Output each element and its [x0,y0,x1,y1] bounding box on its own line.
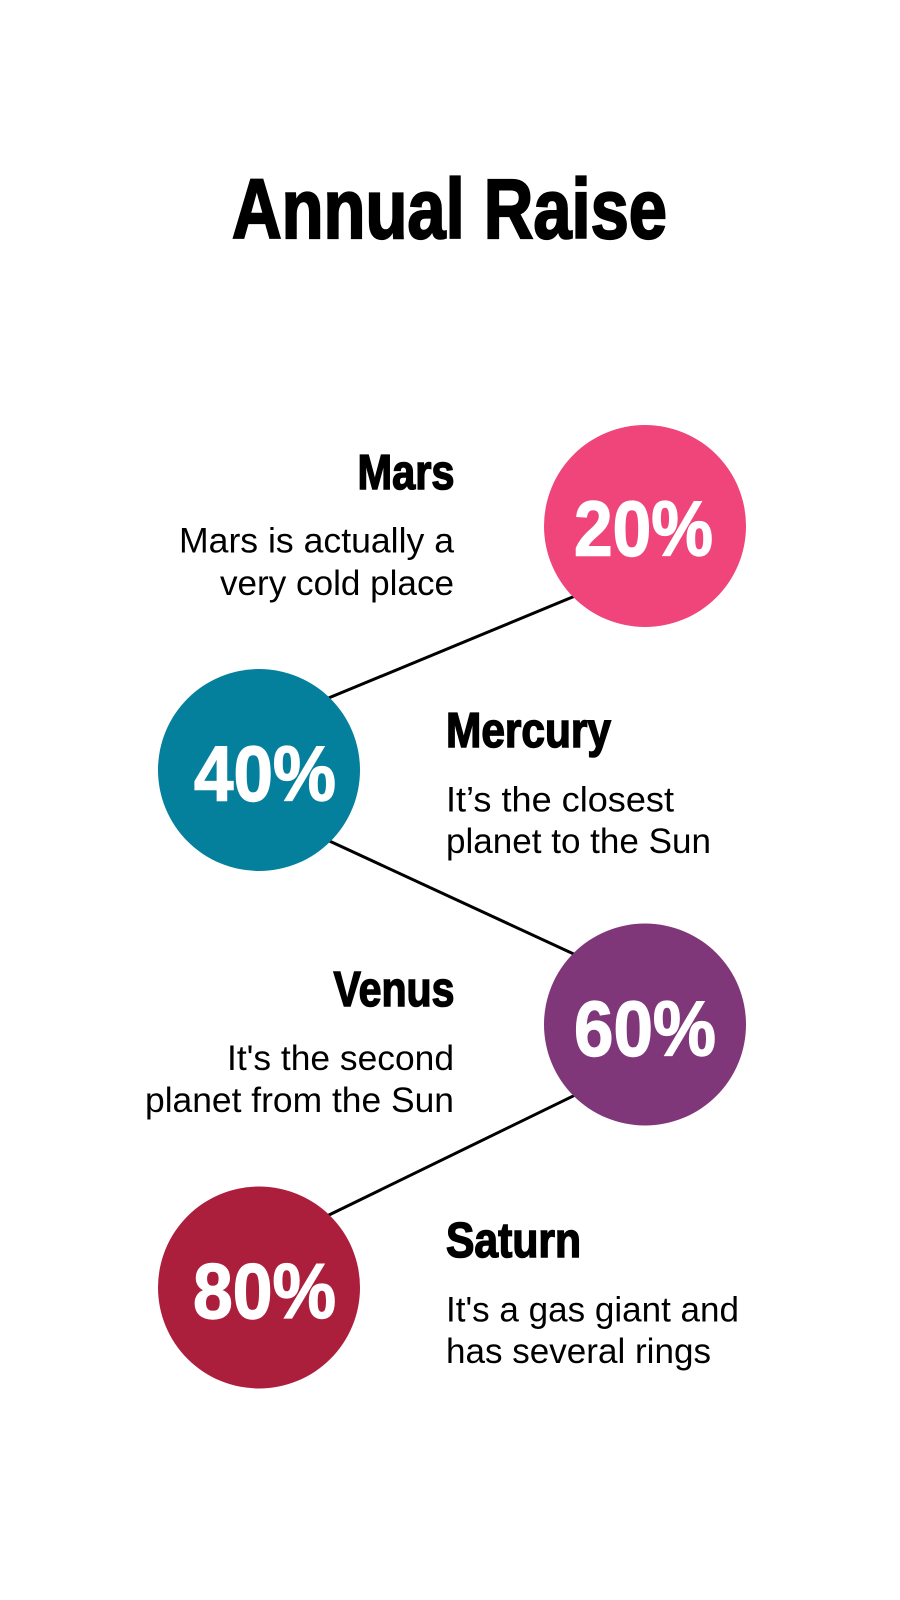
description: Saturn [446,1291,739,1371]
description: Mercury: It’s the closest [446,781,674,820]
panel: Mars 20% [179,425,746,627]
description: Venus: It's the second [227,1039,454,1078]
description: Venus: planet from the Sun [145,1081,454,1120]
description: Saturn: It's a gas giant and [446,1291,739,1330]
circle: 80% [158,1186,360,1388]
panel: Saturn 80% [158,1186,739,1388]
heading: Saturn: Saturn [446,1214,581,1268]
title: Annual Raise [232,162,667,256]
circle: 20%: 20% [574,485,713,573]
description: Mars [179,522,455,603]
description: Venus [145,1039,454,1120]
heading: Venus: Venus [334,963,454,1017]
circle: 60%: 60% [574,985,716,1073]
circle: 80%: 80% [193,1247,336,1335]
description: Mars: Mars is actually a [179,522,455,561]
circle: 40% [158,669,360,871]
circle: 60% [544,924,746,1126]
description: Mercury: planet to the Sun [446,822,711,861]
panel: Mercury 40% [158,669,711,871]
connector lines [311,589,591,1224]
circle: 20% [544,425,746,627]
heading: Mercury: Mercury [446,704,611,758]
description: Mars: very cold place [220,564,454,603]
circle: 40%: 40% [194,730,336,818]
heading: Mars: Mars [358,446,454,500]
panel: Venus 60% [145,924,746,1126]
description: Mercury [446,781,711,861]
description: Saturn: has several rings [446,1332,711,1371]
